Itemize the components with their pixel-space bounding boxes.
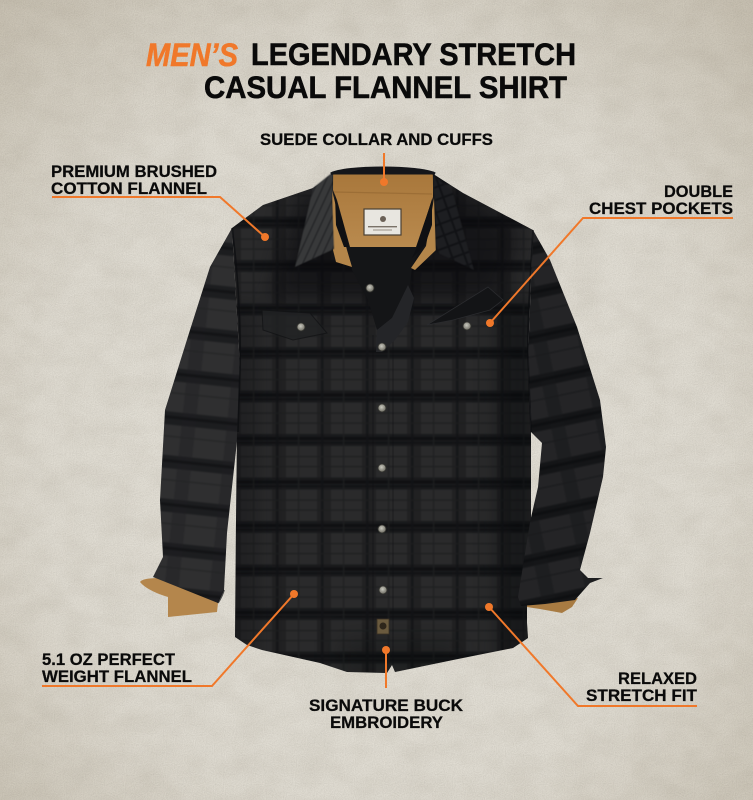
suede collar band shadow xyxy=(334,192,432,194)
inner suede collar xyxy=(333,173,433,247)
left pocket flap xyxy=(262,310,327,340)
callout: relaxed stretch fit: STRETCH FIT xyxy=(586,686,698,705)
shoulder and side shading xyxy=(230,190,535,680)
callout: 5.1 oz perfect weight flannel: WEIGHT FLANNEL xyxy=(42,667,192,686)
callout: premium brushed cotton flannel: PREMIUM BRUSHED xyxy=(51,162,217,181)
left suede strip xyxy=(332,190,352,267)
title line 2: CASUAL FLANNEL SHIRT xyxy=(204,69,567,105)
callout: relaxed stretch fit: RELAXED xyxy=(618,669,697,688)
neck label xyxy=(364,209,401,235)
callout: suede collar and cuffs xyxy=(260,130,493,186)
callout: relaxed stretch fit xyxy=(485,603,698,706)
right inner fold shadow xyxy=(412,199,432,258)
callout: 5.1 oz perfect weight flannel: 5.1 OZ PERFECT xyxy=(42,650,176,669)
signature buck embroidery patch xyxy=(377,619,389,634)
right cuff (suede) xyxy=(520,598,578,613)
button placket xyxy=(373,320,393,672)
right suede strip xyxy=(411,198,436,270)
buttons xyxy=(297,284,471,594)
callout: double chest pockets: CHEST POCKETS xyxy=(589,199,733,218)
collar top band xyxy=(331,168,435,174)
callout: double chest pockets: DOUBLE xyxy=(664,182,733,201)
title accent: MEN'S: MEN’S xyxy=(146,37,239,73)
sleeve seams xyxy=(218,228,533,603)
collar left leaf xyxy=(295,172,334,267)
callout: signature buck embroidery xyxy=(309,646,464,732)
left cuff (suede) xyxy=(140,578,218,617)
callout: 5.1 oz perfect weight flannel xyxy=(42,590,298,686)
callout: signature buck embroidery: EMBROIDERY xyxy=(330,713,444,732)
callout: premium brushed cotton flannel: COTTON FLANNEL xyxy=(51,179,207,198)
shirt body xyxy=(225,160,540,680)
callout: suede collar and cuffs: SUEDE COLLAR AND CUFFS xyxy=(260,130,493,149)
left inner fold shadow xyxy=(335,195,349,247)
right pocket flap xyxy=(427,287,503,325)
title line 1: LEGENDARY STRETCH xyxy=(251,36,576,72)
shirt illustration xyxy=(140,160,610,680)
left sleeve xyxy=(153,228,240,603)
callout: premium brushed cotton flannel xyxy=(51,162,269,241)
neck opening xyxy=(345,245,420,330)
right sleeve xyxy=(518,230,606,606)
center lapel fold xyxy=(376,285,414,352)
callout: double chest pockets xyxy=(486,182,733,327)
collar right leaf xyxy=(433,174,474,270)
title xyxy=(146,36,576,105)
callout: signature buck embroidery: SIGNATURE BUCK xyxy=(309,696,464,715)
